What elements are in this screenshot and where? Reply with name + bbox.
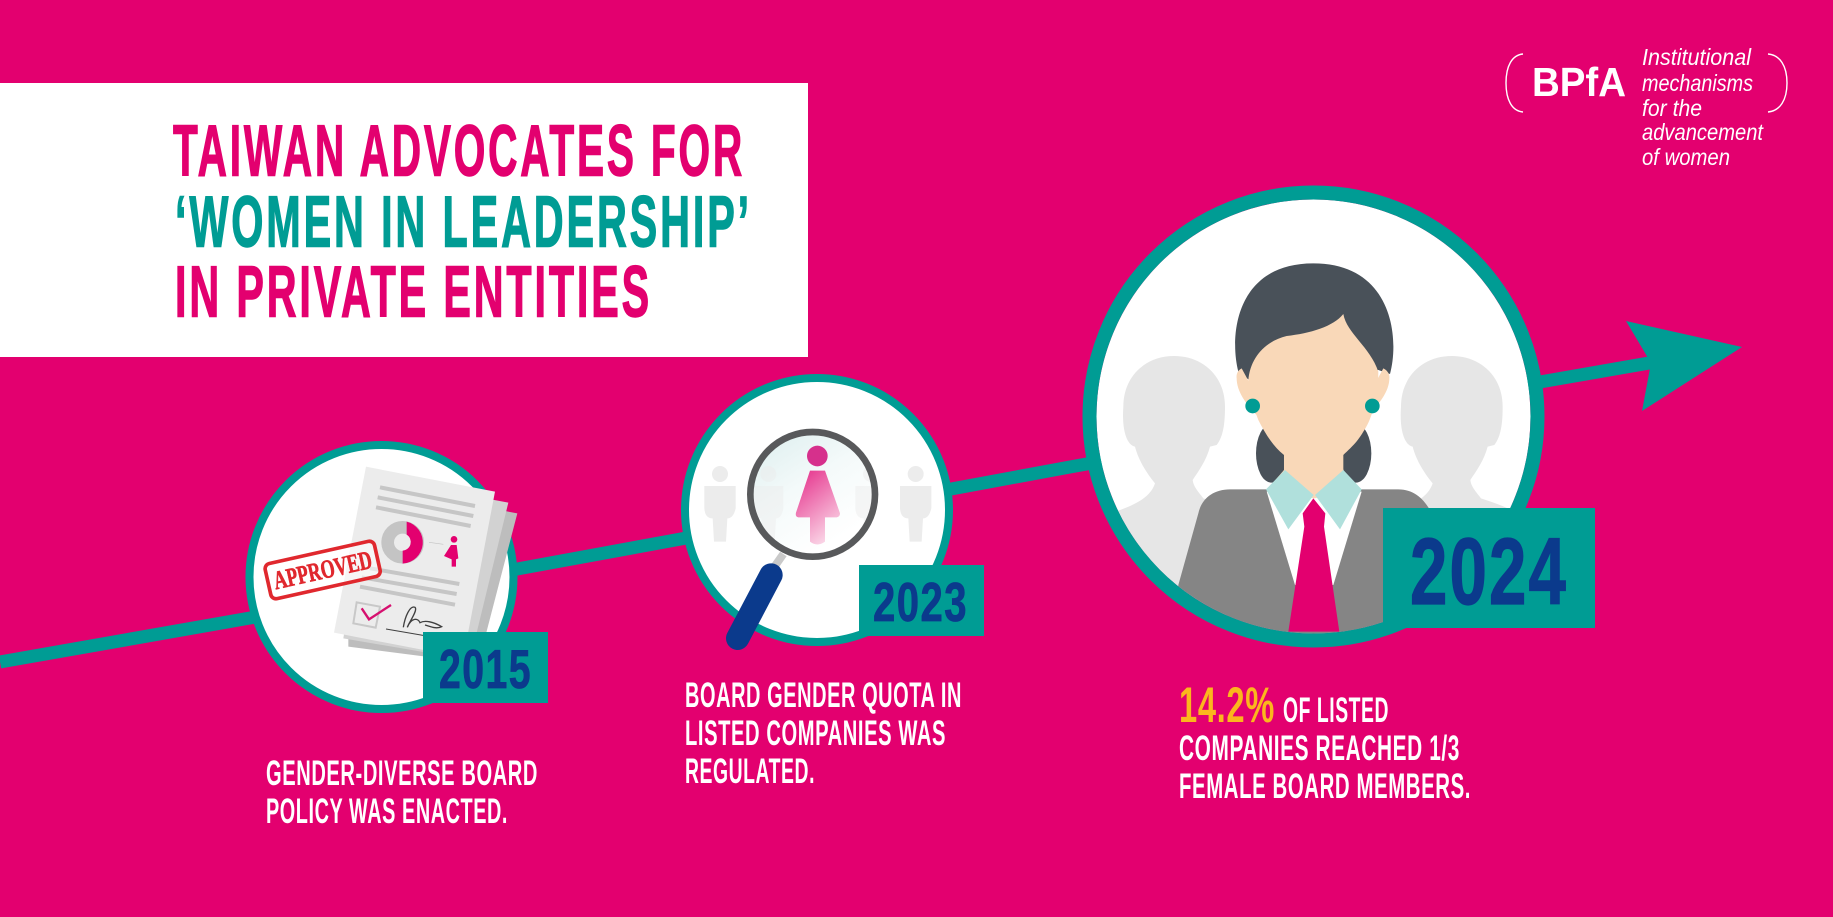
caption 2024: OF LISTED	[1283, 691, 1389, 730]
caption 2015: POLICY WAS ENACTED.	[266, 792, 508, 831]
logo: BPfA: advancement	[1642, 119, 1764, 145]
icon: approved document	[249, 445, 517, 709]
year badge 2015: 2015	[439, 638, 532, 700]
title heading: ‘WOMEN IN LEADERSHIP’	[175, 182, 752, 262]
caption 2023	[685, 676, 962, 791]
milestone 2024	[1089, 192, 1595, 806]
year badge 2023: 2023	[873, 571, 968, 633]
year badge 2023	[859, 565, 984, 636]
stamp: approved: APPROVED	[271, 545, 375, 595]
caption 2024: 14.2%	[1179, 677, 1275, 733]
icon: businesswoman	[1089, 192, 1537, 643]
year badge 2024	[1383, 508, 1595, 628]
year badge 2024: 2024	[1410, 519, 1568, 625]
caption 2023: BOARD GENDER QUOTA IN	[685, 676, 962, 715]
logo: BPfA: of women	[1642, 144, 1730, 170]
logo: BPfA: mechanisms	[1642, 70, 1753, 96]
timeline arrow	[0, 321, 1742, 662]
caption 2015	[266, 754, 538, 831]
milestone 2015	[249, 445, 548, 831]
caption 2023: REGULATED.	[685, 752, 815, 791]
stamp: approved	[264, 540, 381, 600]
caption 2015: GENDER-DIVERSE BOARD	[266, 754, 538, 793]
title heading: IN PRIVATE ENTITIES	[175, 252, 652, 332]
milestone 2023	[685, 378, 984, 791]
logo: BPfA: BPfA	[1532, 59, 1626, 105]
title panel	[0, 83, 808, 357]
caption 2024: FEMALE BOARD MEMBERS.	[1179, 767, 1471, 806]
logo: BPfA: Institutional	[1642, 44, 1752, 70]
caption 2023: LISTED COMPANIES WAS	[685, 714, 946, 753]
logo: BPfA	[1506, 44, 1787, 170]
title heading: TAIWAN ADVOCATES FOR	[173, 112, 745, 192]
year badge 2015	[423, 632, 548, 703]
title heading	[173, 112, 752, 332]
caption 2024	[1179, 677, 1471, 806]
caption 2024: COMPANIES REACHED 1/3	[1179, 729, 1460, 768]
logo: BPfA: for the	[1642, 95, 1702, 121]
icon: magnifier over people	[685, 378, 949, 642]
